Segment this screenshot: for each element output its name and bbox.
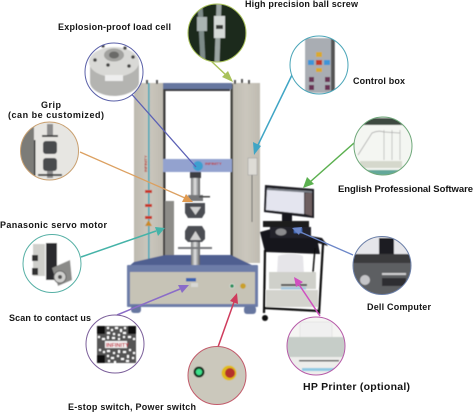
machine feet	[131, 305, 256, 314]
arrow: grip	[80, 152, 193, 202]
arrow: load cell	[128, 90, 196, 167]
arrow: servo motor	[81, 227, 165, 257]
printer	[269, 272, 316, 290]
cart legs	[262, 244, 323, 321]
arrow: software	[303, 143, 354, 188]
label: grip note: (can be customized)	[8, 110, 104, 120]
label: grip: Grip	[41, 100, 62, 110]
arrow: e-stop	[218, 293, 238, 347]
arrow: printer	[294, 277, 320, 316]
callout: ball screw	[188, 4, 246, 62]
label: scan: Scan to contact us	[9, 313, 91, 323]
label: control box: Control box	[353, 76, 405, 86]
label: switches: E-stop switch, Power switch	[68, 402, 196, 412]
label: software: English Professional Software	[338, 184, 473, 195]
callout: computer	[353, 236, 411, 295]
lower grip	[178, 226, 212, 267]
label: printer: HP Printer (optional)	[303, 381, 410, 393]
left column	[134, 80, 174, 269]
callout: e-stop and power switch	[188, 346, 247, 405]
left column: INFINITY	[143, 155, 148, 172]
callout: load cell	[85, 43, 143, 101]
callout: printer	[287, 317, 345, 375]
callout: servo motor	[23, 234, 81, 293]
label: load cell: Explosion-proof load cell	[58, 22, 171, 32]
computer cart	[260, 185, 328, 321]
base top plate	[127, 255, 258, 268]
printer paper	[277, 254, 304, 274]
arrow: scan code	[117, 285, 189, 315]
moving crossbeam: INFINITY	[205, 161, 222, 166]
label: servo motor: Panasonic servo motor	[0, 220, 107, 230]
monitor	[264, 185, 314, 223]
callout: software	[354, 117, 412, 175]
right column	[230, 79, 260, 263]
upper grip	[185, 172, 210, 218]
callout: grip	[20, 122, 79, 181]
lower box	[266, 290, 318, 307]
callout: control box	[290, 36, 350, 94]
top crossbar	[163, 83, 232, 91]
label: computer: Dell Computer	[367, 302, 431, 312]
cart frame	[260, 221, 328, 272]
callout: QR code: INFINITY	[106, 343, 129, 349]
arrows	[80, 60, 354, 347]
arrow: ball screw	[210, 60, 233, 82]
moving crossbeam	[163, 159, 232, 172]
base cabinet	[127, 265, 258, 307]
arrow: computer	[292, 227, 353, 255]
callout: QR code	[86, 315, 144, 373]
arrow: control box	[253, 75, 292, 155]
computer desktop	[270, 227, 311, 238]
testing machine	[127, 79, 260, 314]
